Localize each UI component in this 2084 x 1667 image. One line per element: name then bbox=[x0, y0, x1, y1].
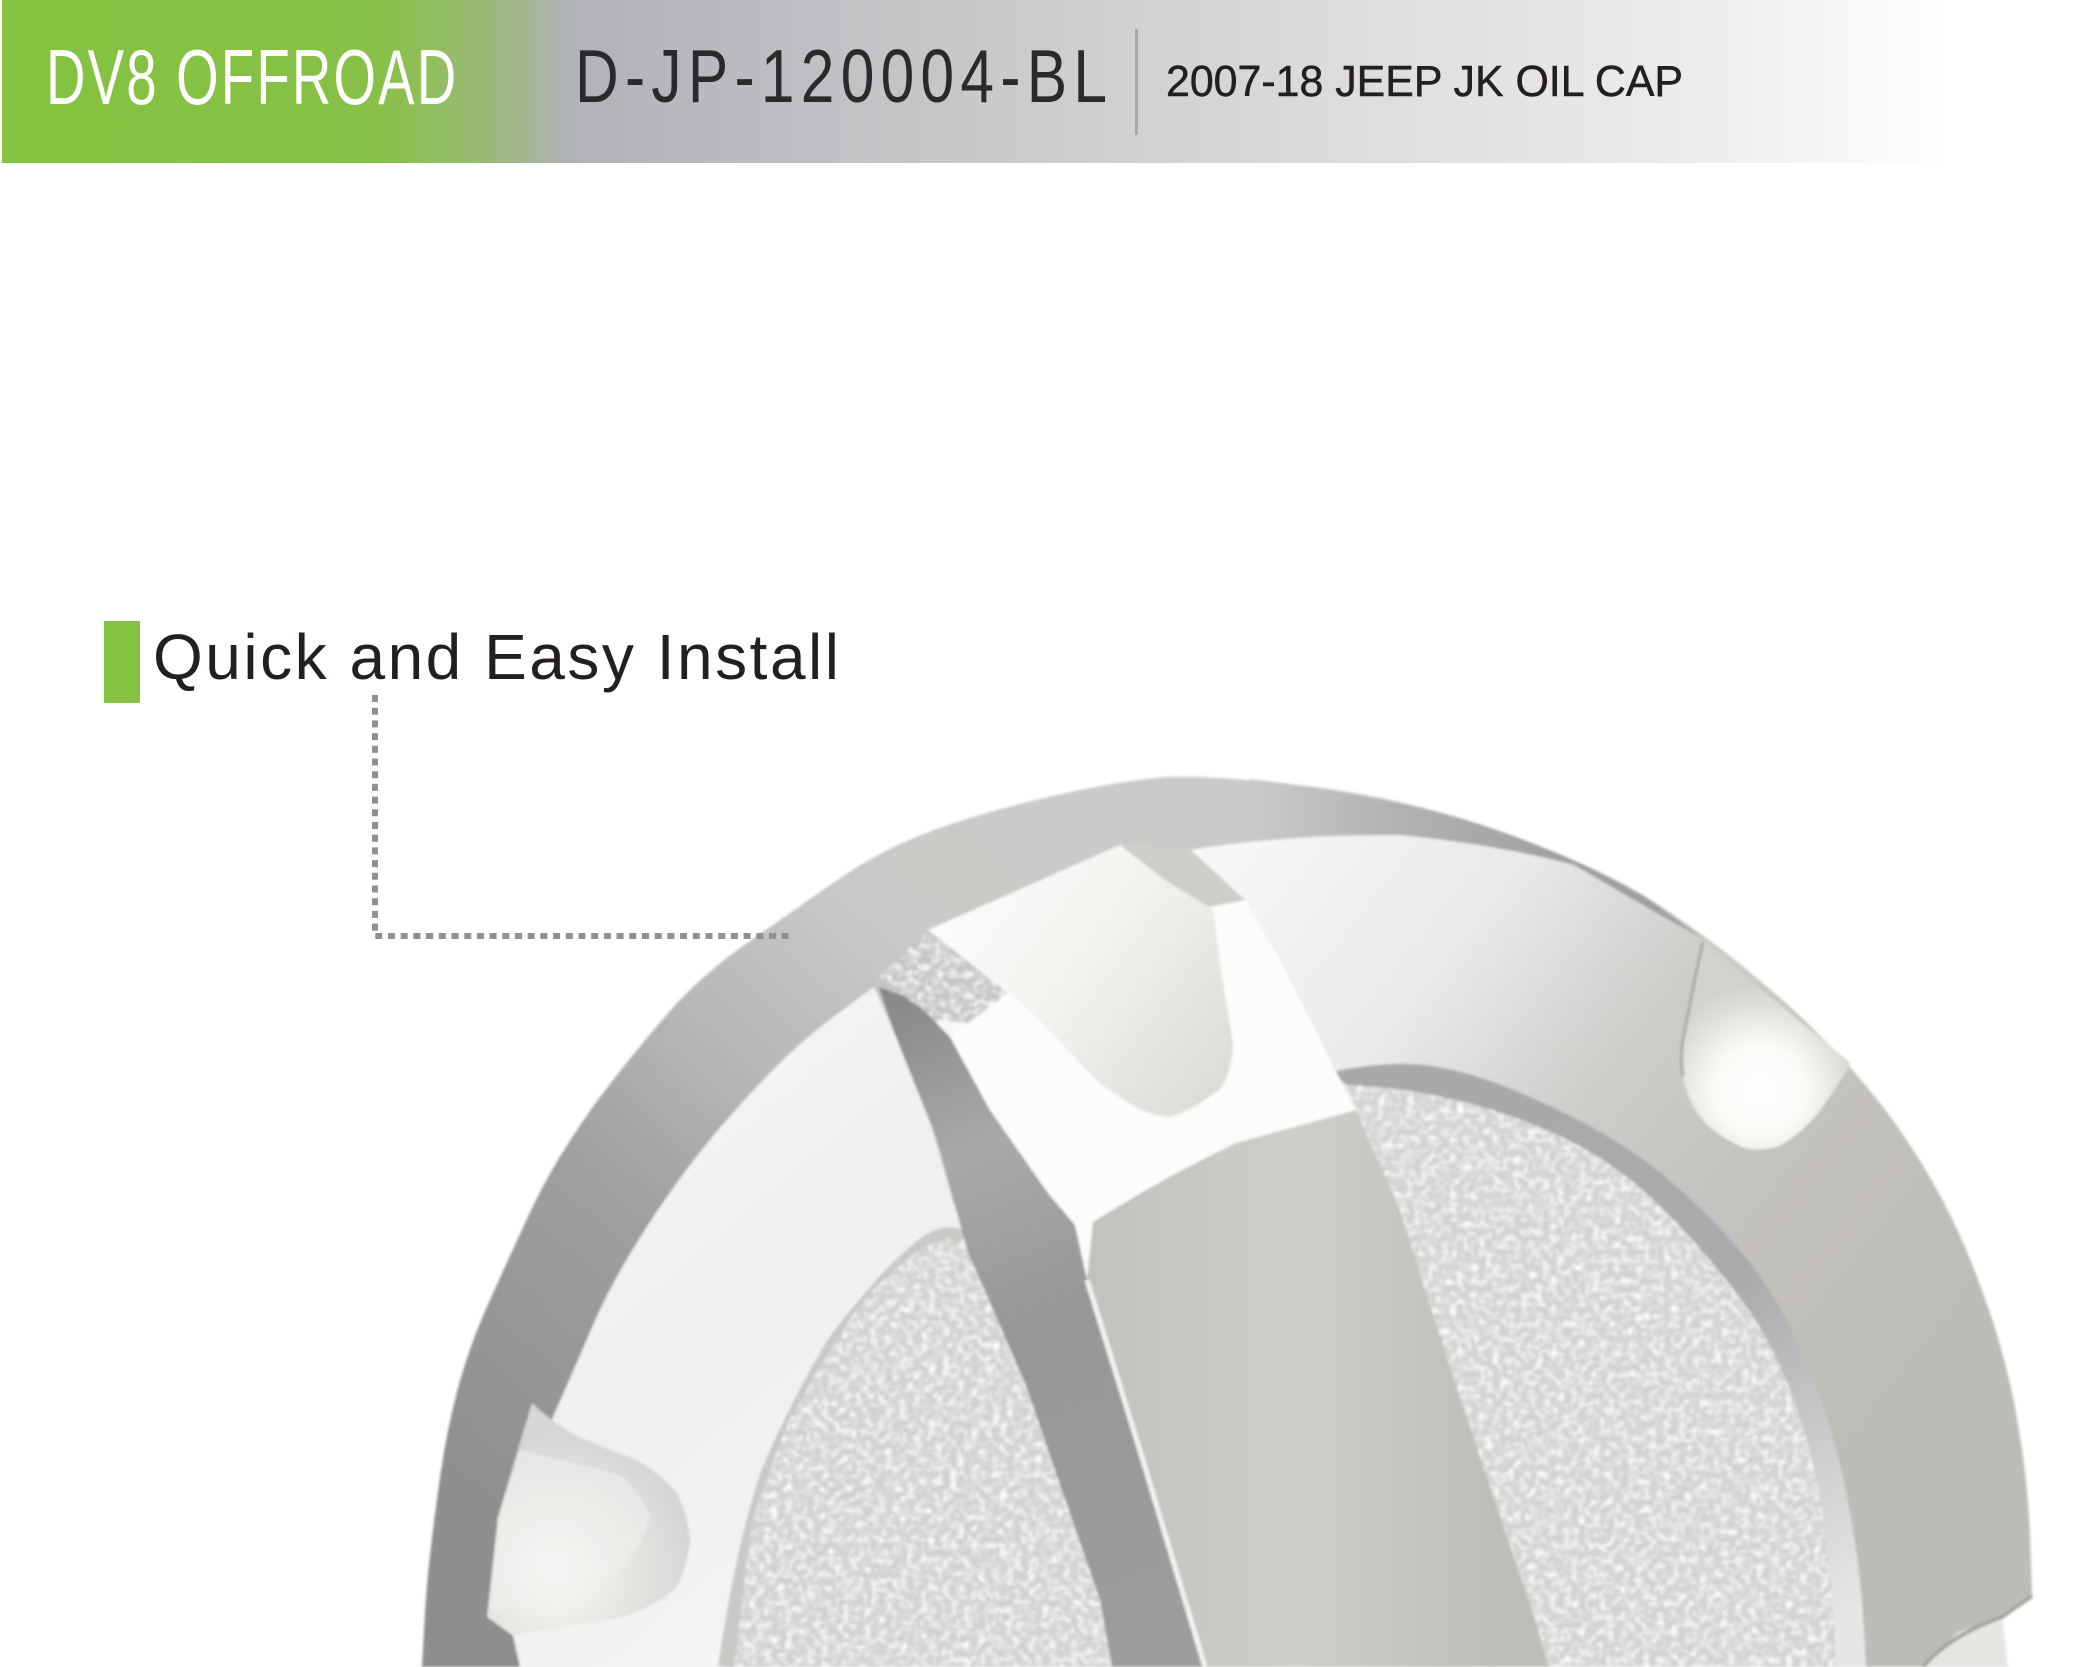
satin raised bar bbox=[1087, 1110, 1549, 1667]
top scoop slot detail bbox=[1120, 845, 1245, 907]
left scoop bbox=[487, 1403, 690, 1635]
bar left highlight line bbox=[1087, 1280, 1205, 1667]
right textured insert bbox=[1347, 1085, 1836, 1667]
header banner bbox=[2, 0, 2084, 163]
lower right notch edge bbox=[1923, 1596, 2032, 1667]
right scoop left edge bbox=[1682, 942, 1703, 1076]
left insert shaded edge bbox=[726, 1235, 962, 1667]
header divider bbox=[1135, 29, 1138, 135]
callout dotted leader line bbox=[375, 695, 793, 936]
rim textured block at fork base bbox=[879, 930, 1008, 1023]
header gradient bar bbox=[2, 0, 2084, 163]
right outer shaded ring bbox=[1330, 1064, 1866, 1667]
left machined face bbox=[505, 987, 1112, 1667]
left textured insert bbox=[735, 1237, 1112, 1667]
top scoop bbox=[928, 845, 1233, 1117]
white fork chamfer bbox=[950, 900, 1356, 1280]
rim upper-right dark band bbox=[1250, 779, 1705, 940]
left scoop inner highlight bbox=[490, 1450, 650, 1610]
lower right light notch bbox=[1923, 1617, 2008, 1667]
cap outer rim bbox=[422, 777, 2032, 1667]
product title: 2007-18 JEEP JK OIL CAP bbox=[1166, 58, 1683, 106]
oil cap product image bbox=[422, 777, 2032, 1667]
right scoop bbox=[1682, 942, 1851, 1150]
callout green marker bbox=[104, 621, 140, 703]
brand name: DV8 OFFROAD bbox=[46, 34, 456, 121]
cap machined face bbox=[928, 835, 2032, 1667]
part number: D-JP-120004-BL bbox=[575, 34, 1107, 119]
callout text: Quick and Easy Install bbox=[153, 621, 839, 693]
dark groove bbox=[879, 987, 1205, 1667]
callout: quick and easy install bbox=[104, 621, 839, 936]
